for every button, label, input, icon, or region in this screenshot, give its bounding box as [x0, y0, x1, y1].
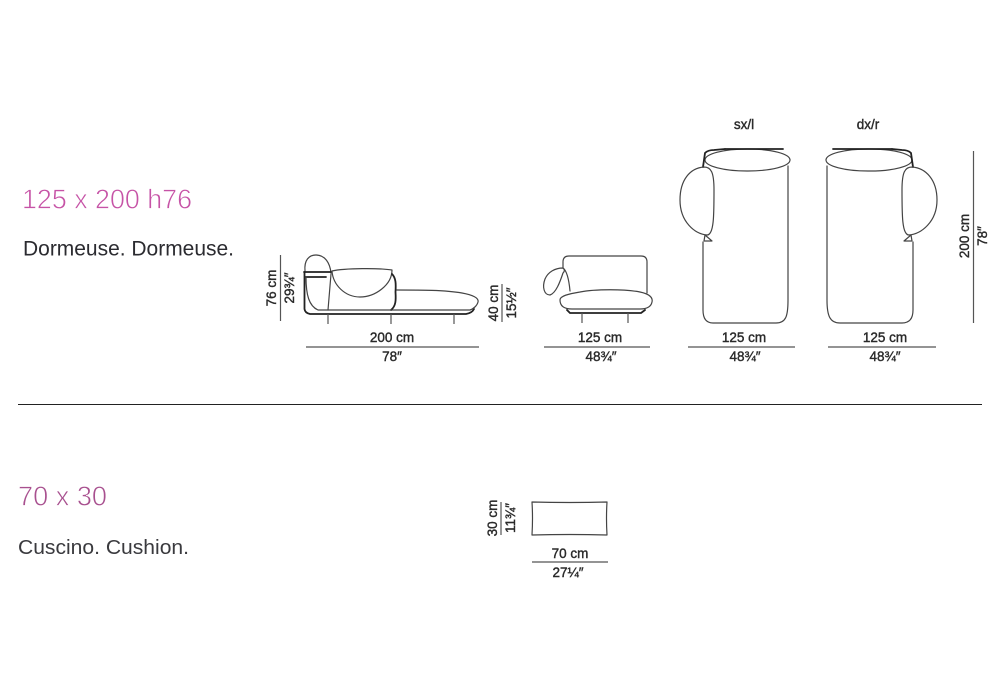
dimension: 125 cm front	[544, 330, 650, 364]
base	[567, 310, 645, 313]
drawing: cushion	[532, 502, 607, 535]
dimension: 200 cm depth: 200 cm	[957, 214, 972, 258]
heading: 70 x 30: 70 x 30	[18, 480, 107, 512]
strap	[703, 149, 725, 167]
legs	[328, 314, 454, 324]
headrest	[705, 149, 790, 171]
label: Cushion: Cuscino. Cushion.	[18, 537, 189, 559]
dimension: 30 cm height	[485, 500, 518, 536]
legs	[582, 313, 628, 323]
drawing: top view left	[680, 149, 790, 323]
dimension: 76 cm height: 29¾″	[282, 272, 297, 304]
side cushion	[902, 167, 937, 235]
backrest	[563, 256, 647, 293]
draped cushion	[544, 268, 564, 295]
triangle	[704, 235, 712, 241]
bolster	[391, 274, 396, 310]
drawing: front view	[544, 256, 652, 323]
dimension: 70 cm width: 27¼″	[552, 565, 584, 580]
dimension: 70 cm width	[532, 546, 608, 580]
drawing: top view right	[826, 149, 937, 323]
dimension: 125 cm left: 125 cm	[722, 330, 766, 345]
dimension: 76 cm height: 76 cm	[264, 270, 279, 306]
dimension: 125 cm front: 125 cm	[578, 330, 622, 345]
dimension: 30 cm height: 11¾″	[503, 503, 518, 533]
seat	[328, 290, 478, 310]
body	[827, 166, 913, 323]
label: sx/l: sx/l	[734, 117, 754, 132]
dimension: 200 cm width	[306, 330, 479, 364]
dimension: 200 cm width: 78″	[382, 349, 402, 364]
headrest	[305, 255, 331, 273]
dimension: 40 cm height	[486, 284, 519, 322]
back cushion	[332, 269, 392, 297]
headrest	[826, 149, 912, 171]
seat	[560, 290, 652, 309]
triangle	[904, 235, 912, 241]
strap	[304, 272, 331, 277]
drawing: side view	[304, 255, 478, 324]
label: dx/r: dx/r	[857, 117, 880, 132]
dimension: 30 cm height: 30 cm	[485, 500, 500, 536]
dimension: 200 cm depth	[957, 151, 990, 323]
side cushion	[680, 167, 714, 235]
outer cushion	[306, 274, 331, 310]
dimension: 70 cm width: 70 cm	[552, 546, 588, 561]
dimension: 200 cm width: 200 cm	[370, 330, 414, 345]
heading: 125 x 200 h76: 125 x 200 h76	[22, 184, 192, 214]
strap	[563, 268, 570, 291]
dimension: 76 cm height	[264, 255, 297, 321]
dimension: 125 cm right: 125 cm	[863, 330, 907, 345]
dimension: 125 cm front: 48¾″	[585, 349, 617, 364]
label: Dormeuse: Dormeuse. Dormeuse.	[23, 238, 234, 260]
dimension: 125 cm right: 48¾″	[869, 349, 901, 364]
body	[703, 166, 788, 323]
top line	[725, 148, 783, 150]
dimension: 125 cm left: 48¾″	[729, 349, 761, 364]
top line	[833, 148, 892, 150]
back frame	[304, 272, 474, 314]
strap	[892, 149, 913, 167]
dimension: 40 cm height: 40 cm	[486, 285, 501, 321]
dimension: 40 cm height: 15½″	[504, 287, 519, 319]
dimension: 125 cm right	[828, 330, 936, 364]
dimension: 125 cm left	[688, 330, 795, 364]
dimension: 200 cm depth: 78″	[975, 226, 990, 246]
divider	[18, 404, 982, 406]
